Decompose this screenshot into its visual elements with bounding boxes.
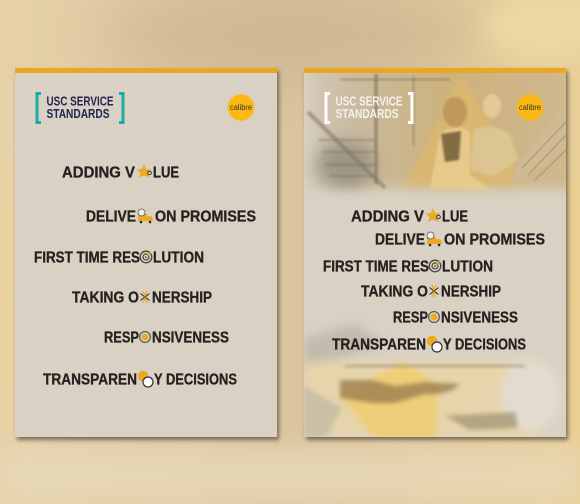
standard: first time resolution: LUTION bbox=[153, 250, 204, 266]
standard: responsiveness bbox=[393, 310, 518, 326]
logo: calibre bbox=[228, 94, 254, 121]
heading: USC Service Standards: USC SERVICE bbox=[336, 94, 402, 108]
standard: taking ownership: TAKING O bbox=[72, 290, 139, 306]
logo: calibre: calibre bbox=[230, 103, 253, 112]
heading: USC Service Standards bbox=[37, 94, 123, 122]
heading: USC Service Standards: STANDARDS bbox=[46, 107, 110, 121]
standard: taking ownership: NERSHIP bbox=[152, 290, 212, 306]
standard: transparency decisions: TRANSPAREN bbox=[43, 372, 137, 388]
panel: right card bbox=[296, 60, 580, 440]
standard: delivery on promises bbox=[86, 208, 256, 226]
standard: adding value: LUE bbox=[442, 208, 468, 226]
standard: responsiveness: NSIVENESS bbox=[441, 310, 518, 326]
standard: delivery on promises bbox=[375, 232, 545, 248]
photo: handshake bbox=[304, 324, 560, 437]
standard: taking ownership bbox=[72, 290, 212, 306]
standard: adding value bbox=[62, 164, 179, 182]
standard: taking ownership bbox=[361, 284, 501, 300]
standard: responsiveness bbox=[104, 330, 229, 346]
heading: USC Service Standards: USC SERVICE bbox=[46, 94, 114, 108]
standard: transparency decisions bbox=[332, 336, 526, 354]
standard: responsiveness: NSIVENESS bbox=[152, 330, 229, 346]
standard: responsiveness: RESP bbox=[104, 330, 139, 346]
standard: delivery on promises: DELIVE bbox=[86, 208, 136, 226]
standard: adding value bbox=[351, 208, 468, 226]
logo: calibre: calibre bbox=[519, 103, 542, 112]
standard: transparency decisions: Y DECISIONS bbox=[154, 372, 237, 388]
orange top bar bbox=[15, 68, 277, 73]
standard: delivery on promises: ON PROMISES bbox=[444, 232, 545, 248]
standard: taking ownership: NERSHIP bbox=[441, 284, 501, 300]
standard: taking ownership: TAKING O bbox=[361, 284, 428, 300]
standard: adding value: ADDING V bbox=[351, 208, 424, 226]
heading: USC Service Standards: STANDARDS bbox=[336, 107, 398, 121]
panel: left card bbox=[15, 68, 279, 440]
standard: transparency decisions: TRANSPAREN bbox=[332, 336, 426, 354]
standard: transparency decisions bbox=[43, 371, 237, 388]
orange top bar bbox=[304, 68, 566, 73]
standard: delivery on promises: ON PROMISES bbox=[155, 208, 256, 226]
logo: calibre bbox=[517, 94, 543, 121]
heading: USC Service Standards bbox=[326, 94, 412, 122]
standard: transparency decisions: Y DECISIONS bbox=[443, 336, 526, 354]
standard: first time resolution: FIRST TIME RES bbox=[34, 250, 140, 266]
standard: first time resolution: FIRST TIME RES bbox=[323, 258, 429, 276]
photo: meeting at window bbox=[304, 73, 566, 437]
standard: delivery on promises: DELIVE bbox=[375, 232, 425, 248]
standard: adding value: ADDING V bbox=[62, 164, 135, 182]
standard: responsiveness: RESP bbox=[393, 310, 428, 326]
standard: first time resolution: LUTION bbox=[442, 258, 493, 276]
standard: adding value: LUE bbox=[153, 164, 179, 182]
